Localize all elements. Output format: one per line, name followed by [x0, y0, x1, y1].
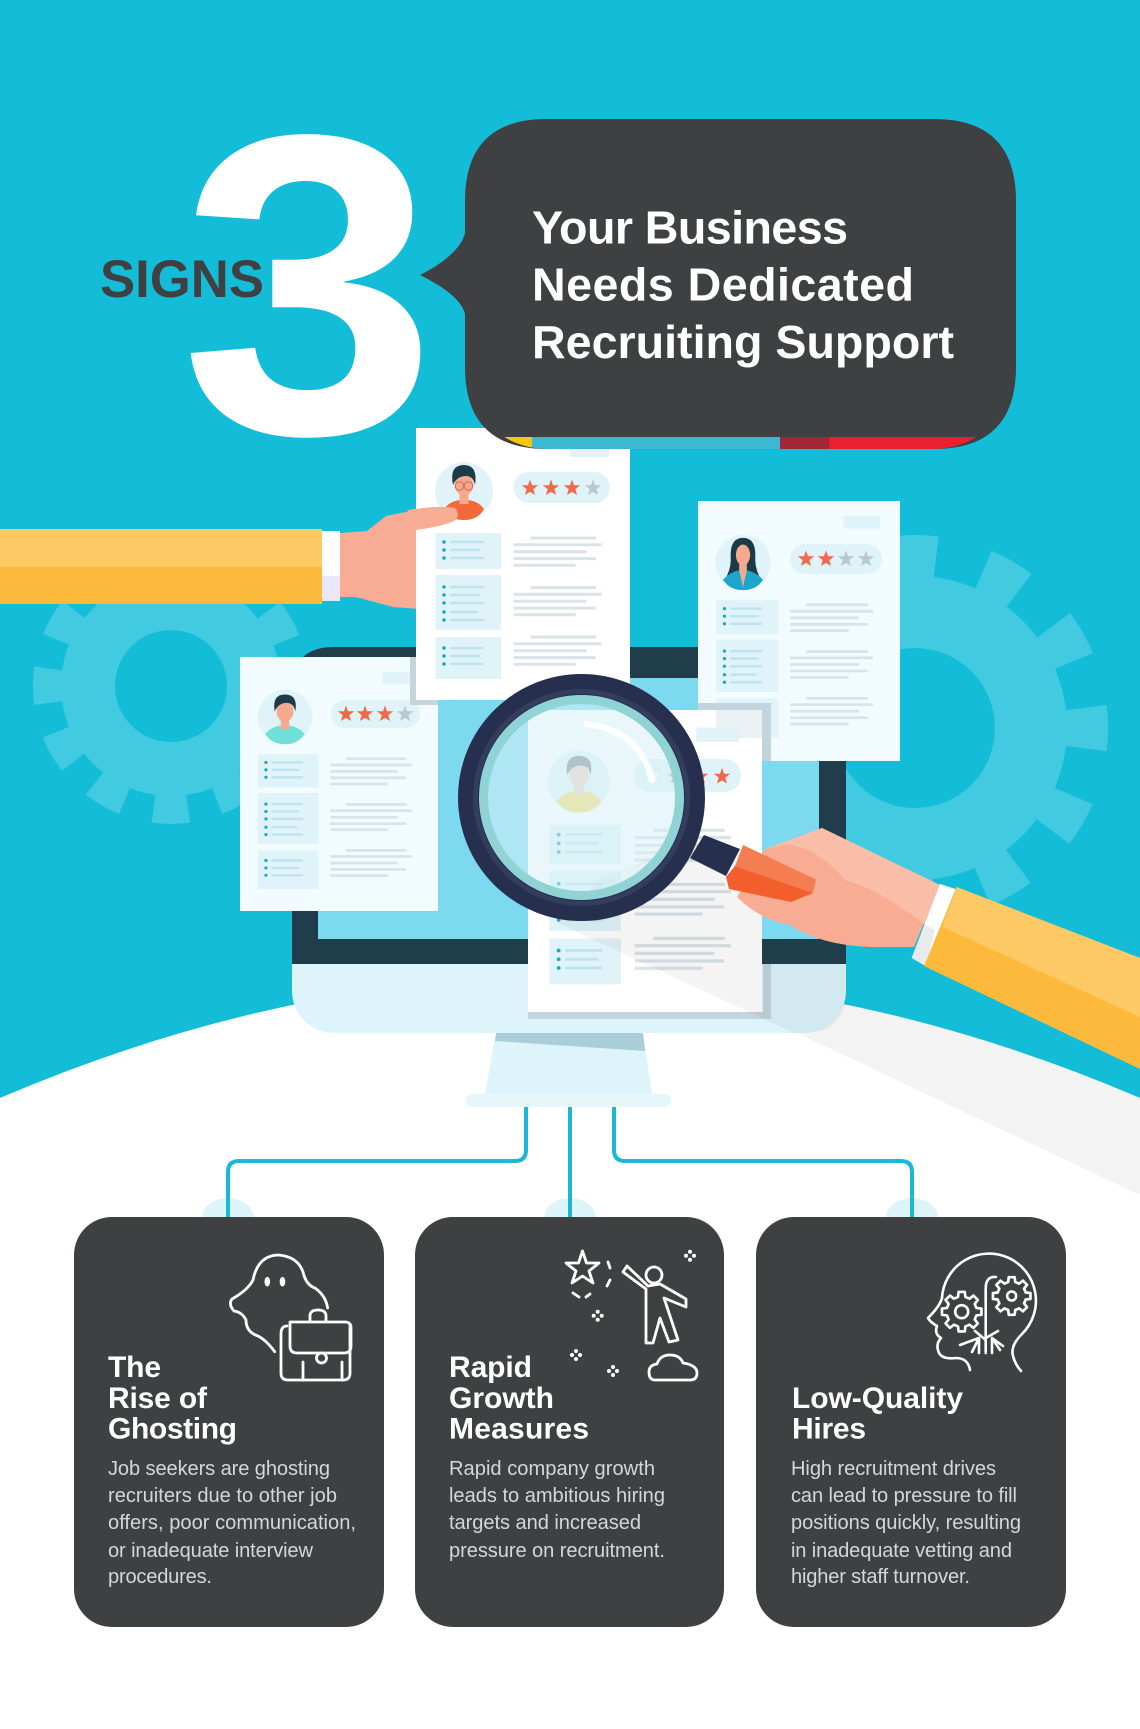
icon: ghost with briefcase: [230, 1255, 351, 1380]
resume: left: [240, 657, 438, 911]
avatar: woman in blue: [715, 535, 771, 590]
resume: centre: [528, 710, 762, 1012]
title: Hires: [792, 1412, 866, 1446]
title: Growth: [449, 1382, 554, 1415]
rating: 2 of 4 stars: [790, 544, 882, 574]
panel: the rise of ghosting: [74, 1217, 384, 1627]
white hill: [0, 976, 1140, 1729]
bubble heading: Recruiting Support: [532, 316, 954, 368]
rating: 3 of 4 stars: [514, 472, 610, 503]
body text: pressure on recruitment.: [449, 1540, 665, 1562]
magnifier grip: [726, 845, 816, 902]
body text: higher staff turnover.: [791, 1566, 970, 1588]
body text: offers, poor communication,: [108, 1512, 356, 1534]
resume: right: [698, 501, 900, 761]
bubble heading: Needs Dedicated: [532, 258, 914, 310]
panel: rapid growth measures: [415, 1217, 724, 1627]
rating pill: [634, 759, 741, 792]
body text: Rapid company growth: [449, 1458, 655, 1480]
panel: low-quality hires: [756, 1217, 1066, 1627]
title: Rise of: [108, 1382, 208, 1415]
title: Rapid: [449, 1351, 532, 1384]
body text: High recruitment drives: [791, 1458, 996, 1480]
colour stripes: [504, 437, 976, 449]
bubble heading: Your Business: [532, 202, 848, 254]
body text: targets and increased: [449, 1512, 641, 1534]
body text: in inadequate vetting and: [791, 1540, 1012, 1562]
body text: or inadequate interview: [108, 1540, 313, 1562]
body text: can lead to pressure to fill: [791, 1485, 1017, 1507]
SIGNS label: SIGNS: [100, 250, 264, 309]
cast shadow over centre resume and monitor: [558, 836, 846, 1033]
body text: recruiters due to other job: [108, 1485, 337, 1507]
long shadow on hill: [798, 1004, 1140, 1195]
rating: 3 of 4 stars: [331, 700, 420, 728]
resume: top: [416, 428, 630, 700]
body text: leads to ambitious hiring: [449, 1485, 665, 1507]
title: The: [108, 1351, 161, 1384]
paper shadows: [528, 703, 771, 1019]
speech bubble: [420, 119, 1016, 449]
big number 3: 3: [180, 47, 437, 524]
right arm: [912, 884, 1140, 1069]
right hand holding magnifier: [726, 828, 940, 948]
left hand thumb: [405, 507, 458, 530]
gear: left: [38, 553, 304, 819]
magnifying glass: [468, 684, 740, 910]
title: Low-Quality: [792, 1382, 963, 1415]
avatar: man with glasses: [435, 462, 493, 520]
left arm: [0, 507, 458, 604]
gear: right: [728, 541, 1102, 915]
body text: Job seekers are ghosting: [108, 1458, 330, 1480]
monitor: [292, 647, 846, 1107]
avatar: man in teal: [258, 690, 312, 744]
connector lines: [202, 1107, 938, 1238]
body text: procedures.: [108, 1566, 212, 1588]
body text: positions quickly, resulting: [791, 1512, 1021, 1534]
left hand palm: [340, 509, 420, 609]
avatar: muted person in yellow: [548, 750, 610, 813]
title: Measures: [449, 1412, 589, 1446]
icon: person reaching for a star: [566, 1250, 697, 1380]
icon: head with gears: [928, 1254, 1036, 1371]
shadow of top resume: [410, 657, 438, 705]
title: Ghosting: [108, 1412, 237, 1446]
